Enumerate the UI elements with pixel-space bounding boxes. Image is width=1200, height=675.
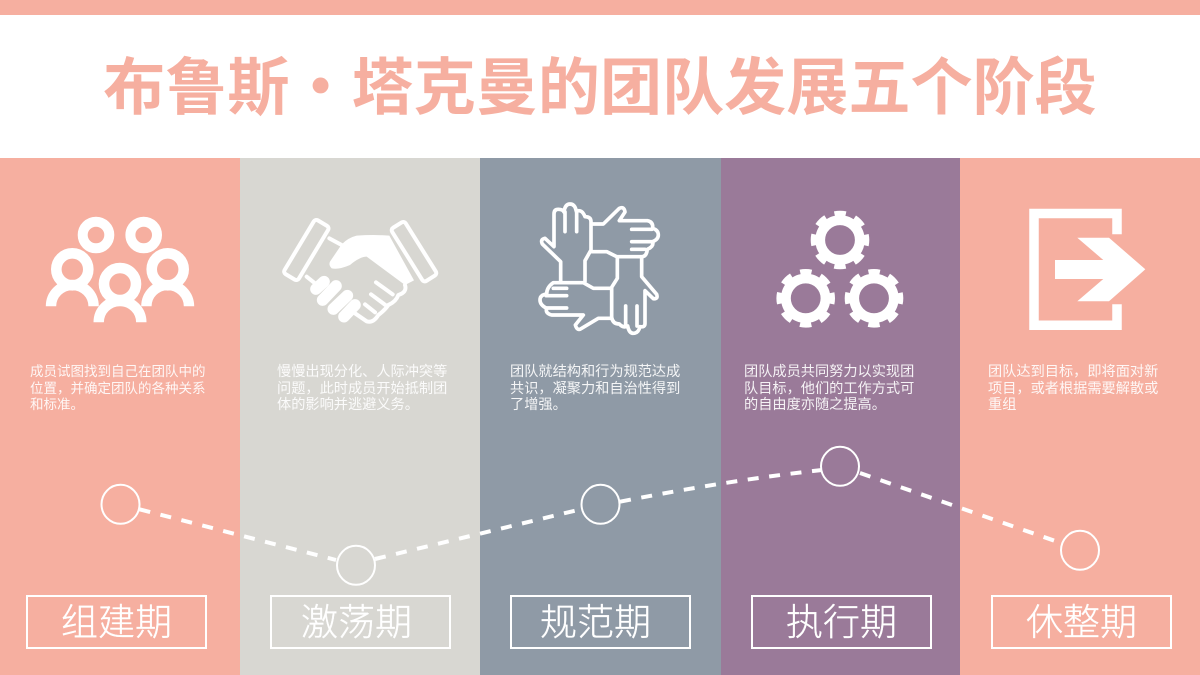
icon: handshake	[283, 219, 437, 322]
icon: exit arrow	[1034, 214, 1145, 325]
text: adjourning description: 项目，或者根据需要解散或	[988, 381, 1158, 397]
text: performing description: 的自由度亦随之提高。	[744, 397, 886, 413]
label: norming	[510, 595, 691, 649]
timeline: stage markers	[102, 447, 1099, 585]
label: norming: 规范期	[540, 602, 651, 643]
label: forming: 组建期	[61, 602, 172, 643]
text: adjourning description: 重组	[988, 397, 1016, 413]
text: storming description: 体的影响并逃避义务。	[277, 397, 419, 413]
panel: adjourning background	[960, 158, 1200, 675]
text: forming description	[30, 364, 206, 412]
text: storming description: 慢慢出现分化、人际冲突等	[277, 364, 447, 380]
text: norming description: 了增强。	[510, 397, 567, 413]
panel: performing background	[721, 158, 960, 675]
icon: four linked hands	[540, 204, 658, 333]
title: 布鲁斯・塔克曼的团队发展五个阶段	[103, 54, 1097, 123]
text: performing description: 队目标，他们的工作方式可	[744, 381, 914, 397]
label: forming	[26, 595, 207, 649]
label: storming	[270, 595, 451, 649]
label: adjourning: 休整期	[1026, 602, 1137, 643]
text: performing description: 团队成员共同努力以实现团	[744, 364, 914, 380]
text: norming description: 团队就结构和行为规范达成	[510, 364, 680, 380]
label: performing	[751, 595, 932, 649]
icon: three gears	[780, 214, 900, 324]
text: norming description: 共识，凝聚力和自治性得到	[510, 381, 680, 397]
label: adjourning	[991, 595, 1172, 649]
label: performing: 执行期	[786, 602, 897, 643]
text: storming description: 问题，此时成员开始抵制团	[277, 381, 447, 397]
text: adjourning description: 团队达到目标，即将面对新	[988, 364, 1158, 380]
text: storming description	[277, 364, 447, 413]
label: storming: 激荡期	[301, 602, 412, 643]
title	[0, 15, 1200, 158]
text: norming description	[510, 364, 680, 413]
top accent bar	[0, 0, 1200, 15]
text: adjourning description	[988, 364, 1158, 413]
panel: norming background	[480, 158, 721, 675]
text: forming description: 成员试图找到自己在团队中的	[30, 364, 206, 379]
panel: forming background	[0, 158, 240, 675]
text: forming description: 和标准。	[30, 397, 84, 412]
panel: storming background	[240, 158, 480, 675]
text: forming description: 位置，并确定团队的各种关系	[30, 381, 206, 396]
text: performing description	[744, 364, 914, 413]
icon: group of people	[51, 222, 189, 322]
timeline: dashed connectors	[140, 470, 1061, 560]
